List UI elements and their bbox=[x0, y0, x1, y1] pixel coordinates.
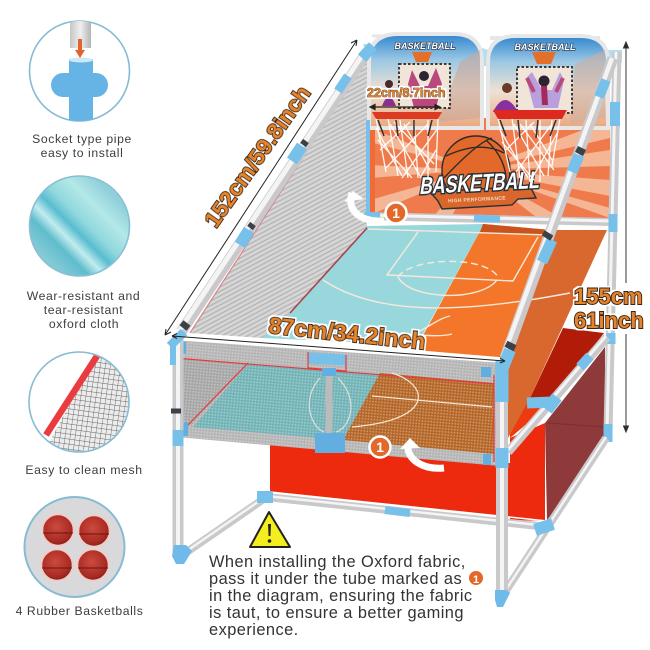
caption: socket pipe: Socket type pipe bbox=[32, 132, 132, 146]
left backboard bbox=[369, 34, 482, 128]
label: height: 61inch bbox=[574, 308, 644, 333]
right backboard bbox=[488, 36, 608, 128]
label: height: 155cm bbox=[574, 284, 643, 309]
bottom arrow marker 1 bbox=[370, 436, 444, 468]
left hoop and net bbox=[372, 112, 442, 178]
caption: oxford cloth: Wear-resistant and bbox=[27, 289, 140, 303]
left rail bbox=[170, 46, 373, 346]
icon: mesh bbox=[28, 351, 130, 453]
caption: oxford cloth: tear-resistant bbox=[44, 303, 123, 317]
right hoop and net bbox=[493, 110, 567, 182]
icon: oxford cloth bbox=[30, 176, 130, 276]
left backboard: BASKETBALL bbox=[394, 41, 456, 51]
storage box bbox=[270, 328, 605, 521]
installation note: experience. bbox=[209, 621, 299, 639]
caption: oxford cloth: oxford cloth bbox=[49, 317, 119, 331]
side panel bbox=[508, 230, 607, 438]
back panel bbox=[370, 118, 610, 220]
label: height bbox=[574, 284, 644, 333]
basketball logo bbox=[418, 136, 542, 209]
top arrow marker 1: 1 bbox=[392, 205, 400, 221]
label: hoop diameter: 22cm/8.7inch bbox=[367, 86, 446, 100]
lower frame pipes bbox=[181, 336, 607, 592]
top arrow marker 1 bbox=[344, 191, 406, 224]
label: length: 152cm/59.8inch bbox=[200, 81, 316, 232]
bottom arrow marker 1: 1 bbox=[376, 439, 384, 455]
right backboard: BASKETBALL bbox=[514, 42, 576, 52]
basketball logo: HIGH PERFORMANCE bbox=[448, 195, 506, 205]
front frame pipes bbox=[171, 335, 510, 607]
side net bbox=[190, 58, 367, 338]
installation note: in the diagram, ensuring the fabric bbox=[209, 587, 473, 605]
dimension arrow: length bbox=[165, 40, 357, 335]
icon: four basketballs bbox=[24, 497, 124, 597]
basketball logo: BASKETBALL bbox=[418, 167, 542, 200]
caption: mesh: Easy to clean mesh bbox=[25, 463, 143, 477]
icon: inline marker 1 bbox=[469, 571, 483, 586]
icon: socket pipe bbox=[30, 18, 130, 124]
installation note: is taut, to ensure a better gaming bbox=[209, 604, 464, 622]
right rail bbox=[502, 58, 613, 370]
label: width: 87cm/34.2inch bbox=[267, 312, 427, 354]
dimension arrow: height bbox=[624, 42, 628, 432]
caption: basketballs: 4 Rubber Basketballs bbox=[16, 604, 143, 618]
icon: warning triangle bbox=[250, 512, 290, 547]
installation note: pass it under the tube marked as bbox=[209, 570, 462, 588]
icon: inline marker 1: 1 bbox=[473, 574, 479, 586]
dimension arrow: width bbox=[172, 334, 505, 363]
top frame bbox=[363, 36, 622, 66]
front net bbox=[172, 340, 503, 466]
back frame pipes bbox=[364, 52, 617, 442]
caption: socket pipe: easy to install bbox=[41, 146, 123, 160]
dimension arrow: hoop bbox=[370, 104, 440, 110]
court bbox=[262, 224, 570, 358]
installation note: When installing the Oxford fabric, bbox=[209, 553, 466, 571]
